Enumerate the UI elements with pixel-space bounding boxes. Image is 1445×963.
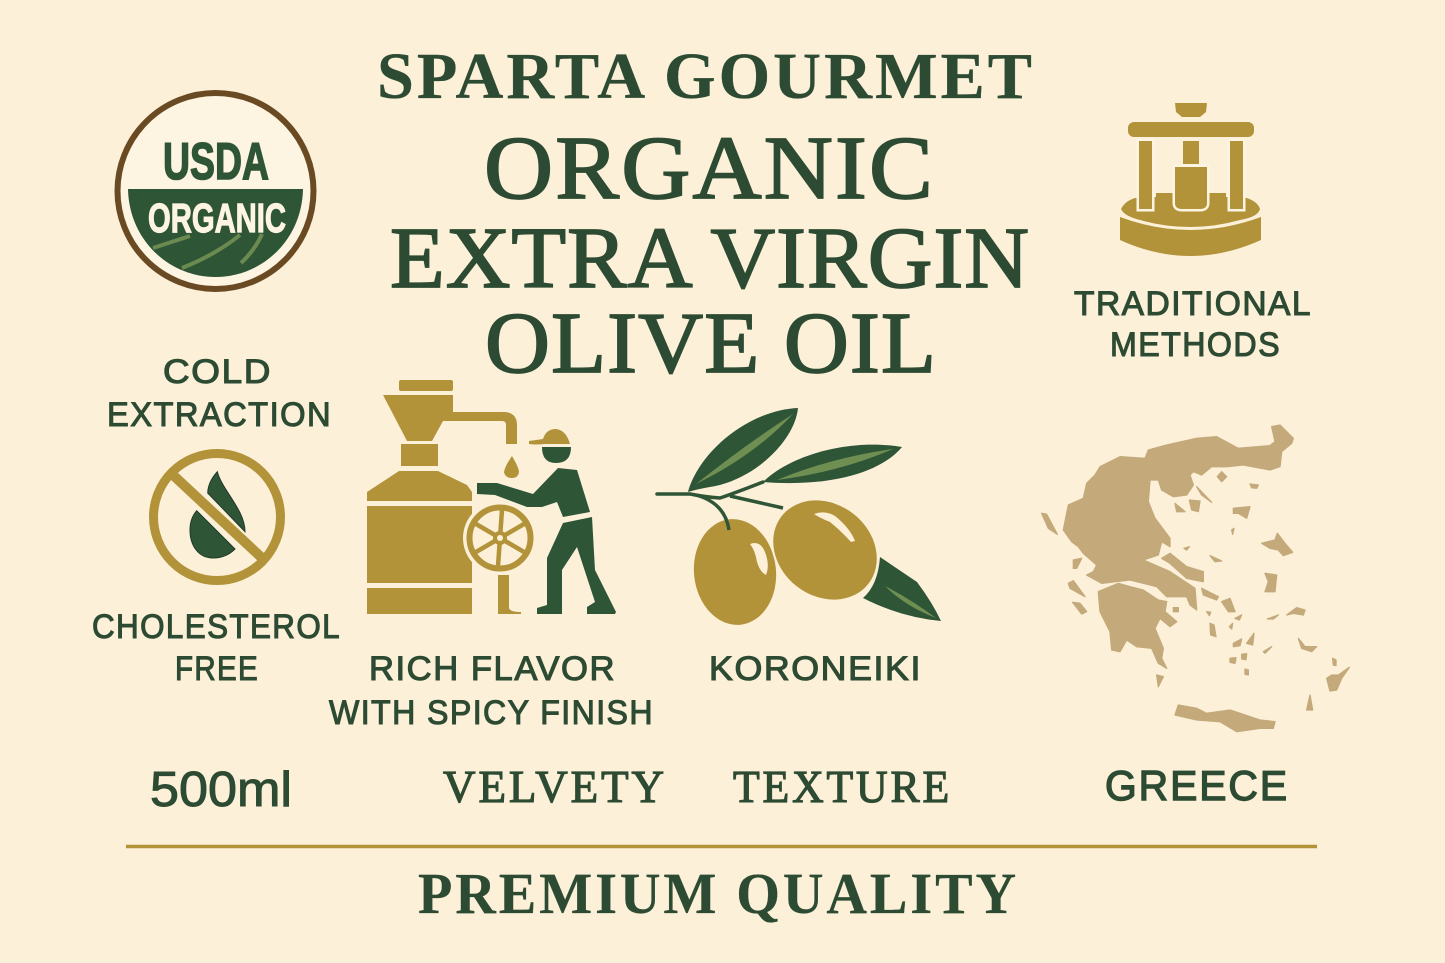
- icon: USDA organic seal: ORGANIC: [148, 195, 286, 241]
- label: cold extraction: COLD: [163, 353, 272, 391]
- label: cholesterol free: FREE: [175, 650, 259, 688]
- label: Greece: GREECE: [1105, 762, 1289, 809]
- icon: traditional press: [1120, 103, 1261, 256]
- label: rich flavor: WITH SPICY FINISH: [329, 694, 654, 732]
- label: traditional methods: [1074, 285, 1312, 364]
- icon: USDA organic seal: [118, 93, 314, 289]
- title: product name: OLIVE OIL: [485, 294, 937, 391]
- label: rich flavor: RICH FLAVOR: [369, 650, 616, 688]
- title: product name: ORGANIC: [484, 119, 935, 218]
- label: koroneiki: KORONEIKI: [709, 650, 922, 688]
- title: product name: EXTRA VIRGIN: [390, 209, 1030, 306]
- icon: USDA organic seal: USDA: [163, 133, 269, 191]
- label: cholesterol free: CHOLESTEROL: [92, 608, 341, 646]
- icon: cholesterol free: [154, 454, 280, 580]
- label: cold extraction: EXTRACTION: [107, 396, 332, 434]
- label: cold extraction: [107, 353, 332, 434]
- title: product name: [390, 119, 1030, 391]
- label: velvety: VELVETY: [443, 761, 667, 812]
- label: traditional methods: TRADITIONAL: [1074, 285, 1312, 323]
- footer: premium quality: PREMIUM QUALITY: [418, 861, 1019, 926]
- label: traditional methods: METHODS: [1110, 326, 1281, 364]
- title: brand name: SPARTA GOURMET: [377, 40, 1035, 113]
- label: texture: TEXTURE: [733, 761, 952, 812]
- icon: cold extraction machine with worker: [367, 380, 616, 614]
- label: volume: 500ml: [150, 763, 292, 817]
- label: rich flavor: [329, 650, 654, 732]
- icon: olive branch: [657, 408, 941, 629]
- map of Greece: [1042, 425, 1349, 732]
- label: cholesterol free: [92, 608, 341, 688]
